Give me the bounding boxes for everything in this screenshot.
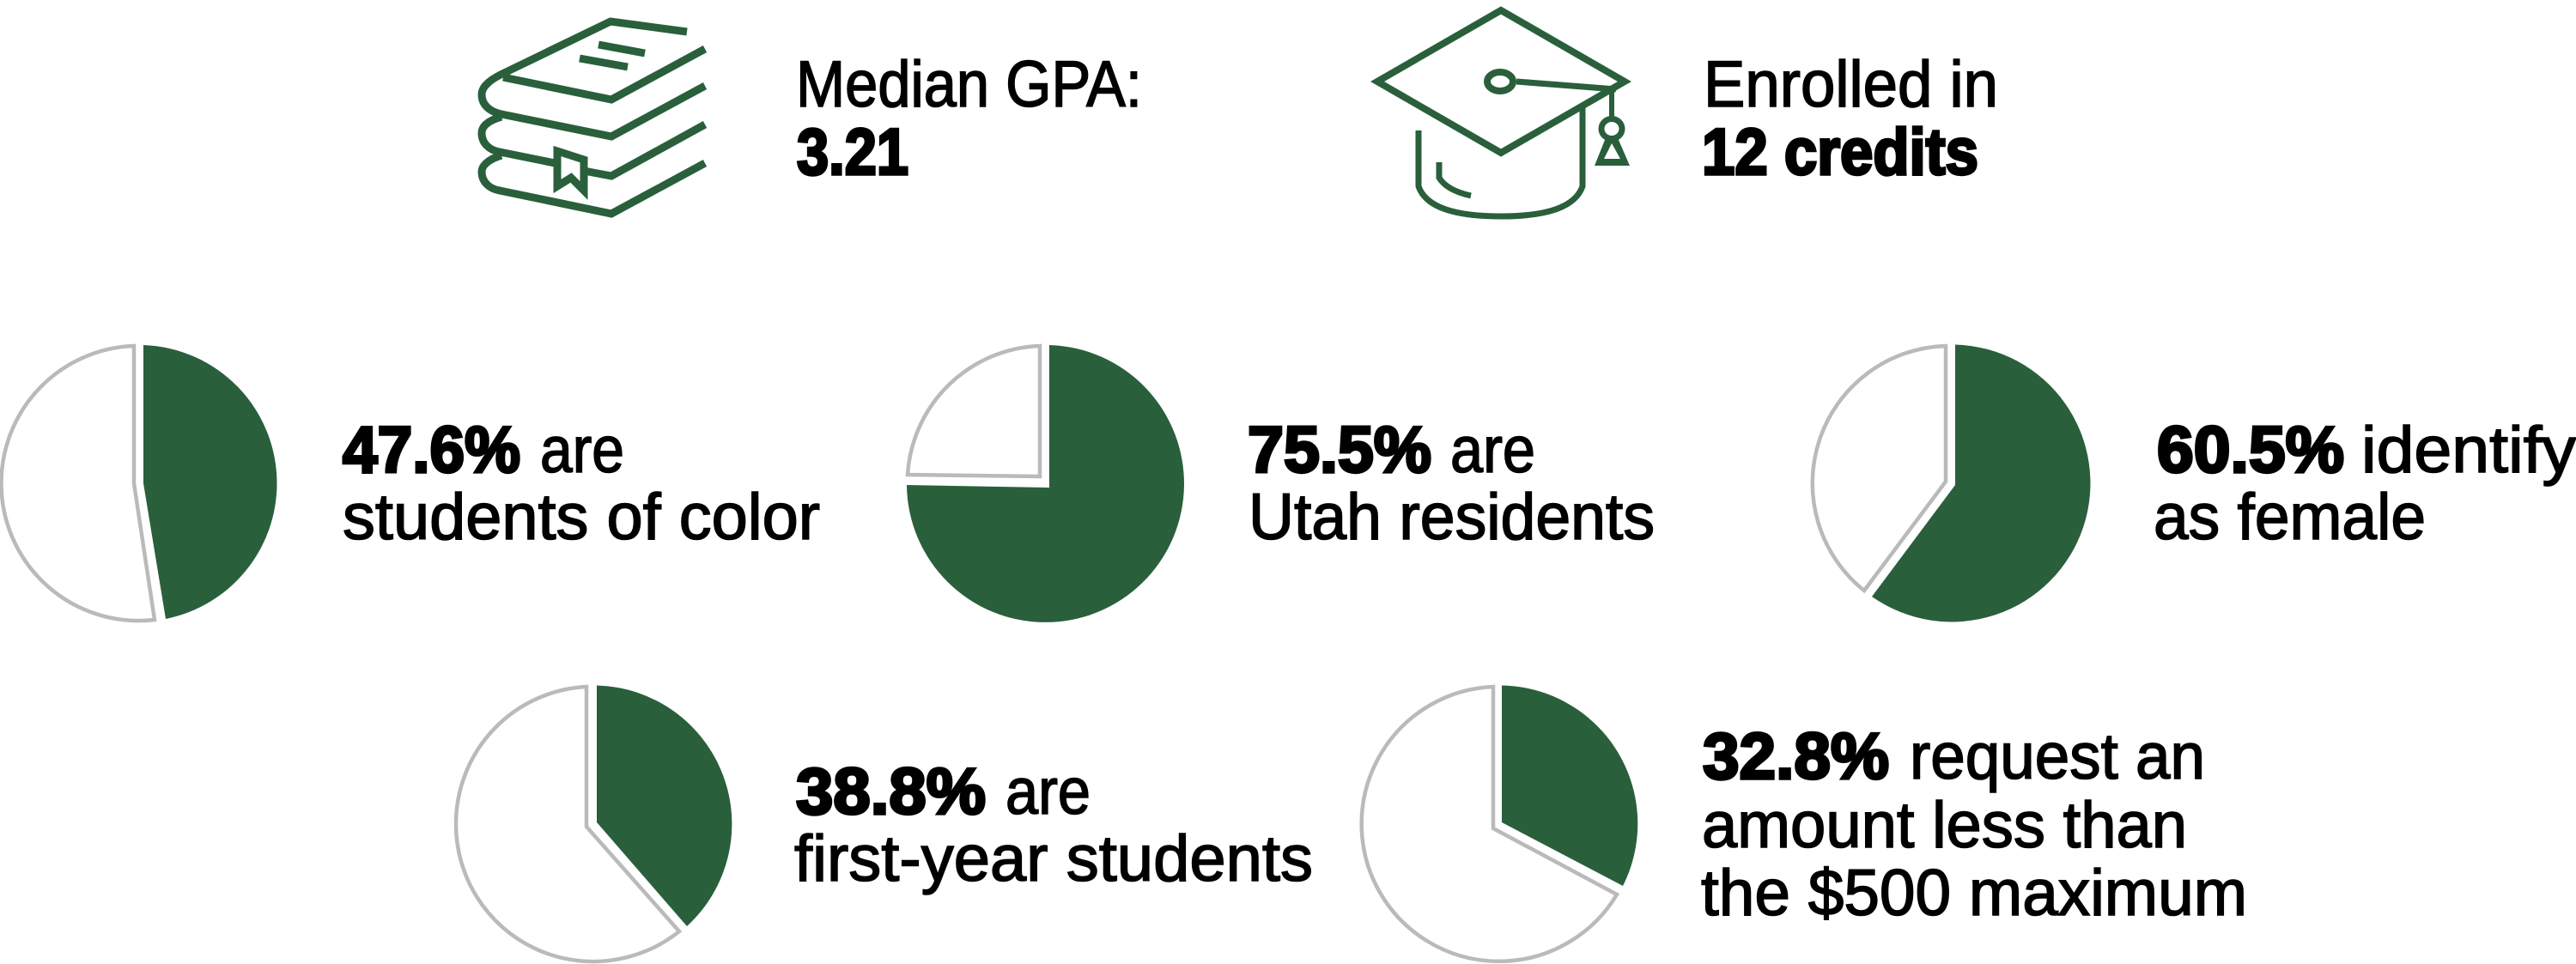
stat: median GPA xyxy=(482,21,1142,214)
value: 12 credits: 12 credits xyxy=(1702,116,1978,189)
pie chart: 60.5% xyxy=(1813,345,2090,621)
text: 32.8% request an amount less than the $500 maximum: request an xyxy=(1910,720,2205,793)
pie chart: 75.5% xyxy=(907,345,1184,622)
text: 75.5% are Utah residents: Utah residents xyxy=(1249,481,1655,554)
text: 32.8% request an amount less than the $500 maximum: 32.8% xyxy=(1703,720,1889,793)
text: 32.8% request an amount less than the $500 maximum: amount less than xyxy=(1702,789,2187,862)
text: 60.5% identify as female xyxy=(2154,414,2576,554)
text: 75.5% are Utah residents: are xyxy=(1450,414,1535,487)
icon: stack of books xyxy=(482,21,705,214)
text: 32.8% request an amount less than the $500 maximum: the $500 maximum xyxy=(1701,857,2247,930)
text: 60.5% identify as female: as female xyxy=(2154,481,2426,554)
stat: Utah residents xyxy=(907,345,1655,622)
stat: enrolled credits xyxy=(1377,10,1998,216)
label: Enrolled in: Enrolled in xyxy=(1704,48,1998,121)
text: 60.5% identify as female: identify xyxy=(2361,414,2576,487)
text: 38.8% are first-year students: are xyxy=(1005,755,1091,828)
text: 38.8% are first-year students: first-year students xyxy=(794,822,1313,895)
text: 47.6% are students of color: are xyxy=(540,414,624,487)
pie chart: 38.8% xyxy=(456,685,732,961)
label: Median GPA: Median GPA: xyxy=(796,48,1142,121)
text: 75.5% are Utah residents xyxy=(1248,414,1655,554)
icon: graduation cap xyxy=(1377,10,1630,216)
stat: request below maximum xyxy=(1362,685,2247,961)
value: 3.21: 3.21 xyxy=(797,116,908,189)
text: 38.8% are first-year students: 38.8% xyxy=(796,755,986,828)
text: 38.8% are first-year students xyxy=(794,755,1313,895)
pie chart: 32.8% xyxy=(1362,685,1637,961)
text: 47.6% are students of color xyxy=(343,414,820,554)
stat: students of color xyxy=(1,345,820,621)
text: 32.8% request an amount less than the $500 maximum xyxy=(1701,720,2247,930)
stat: first-year students xyxy=(456,685,1313,961)
text: 47.6% are students of color: students of color xyxy=(343,481,820,554)
text: 75.5% are Utah residents: 75.5% xyxy=(1248,414,1431,487)
stat: identify as female xyxy=(1813,345,2576,621)
text: 47.6% are students of color: 47.6% xyxy=(343,414,520,487)
text: 60.5% identify as female: 60.5% xyxy=(2157,414,2344,487)
pie chart: 47.6% xyxy=(1,345,277,621)
